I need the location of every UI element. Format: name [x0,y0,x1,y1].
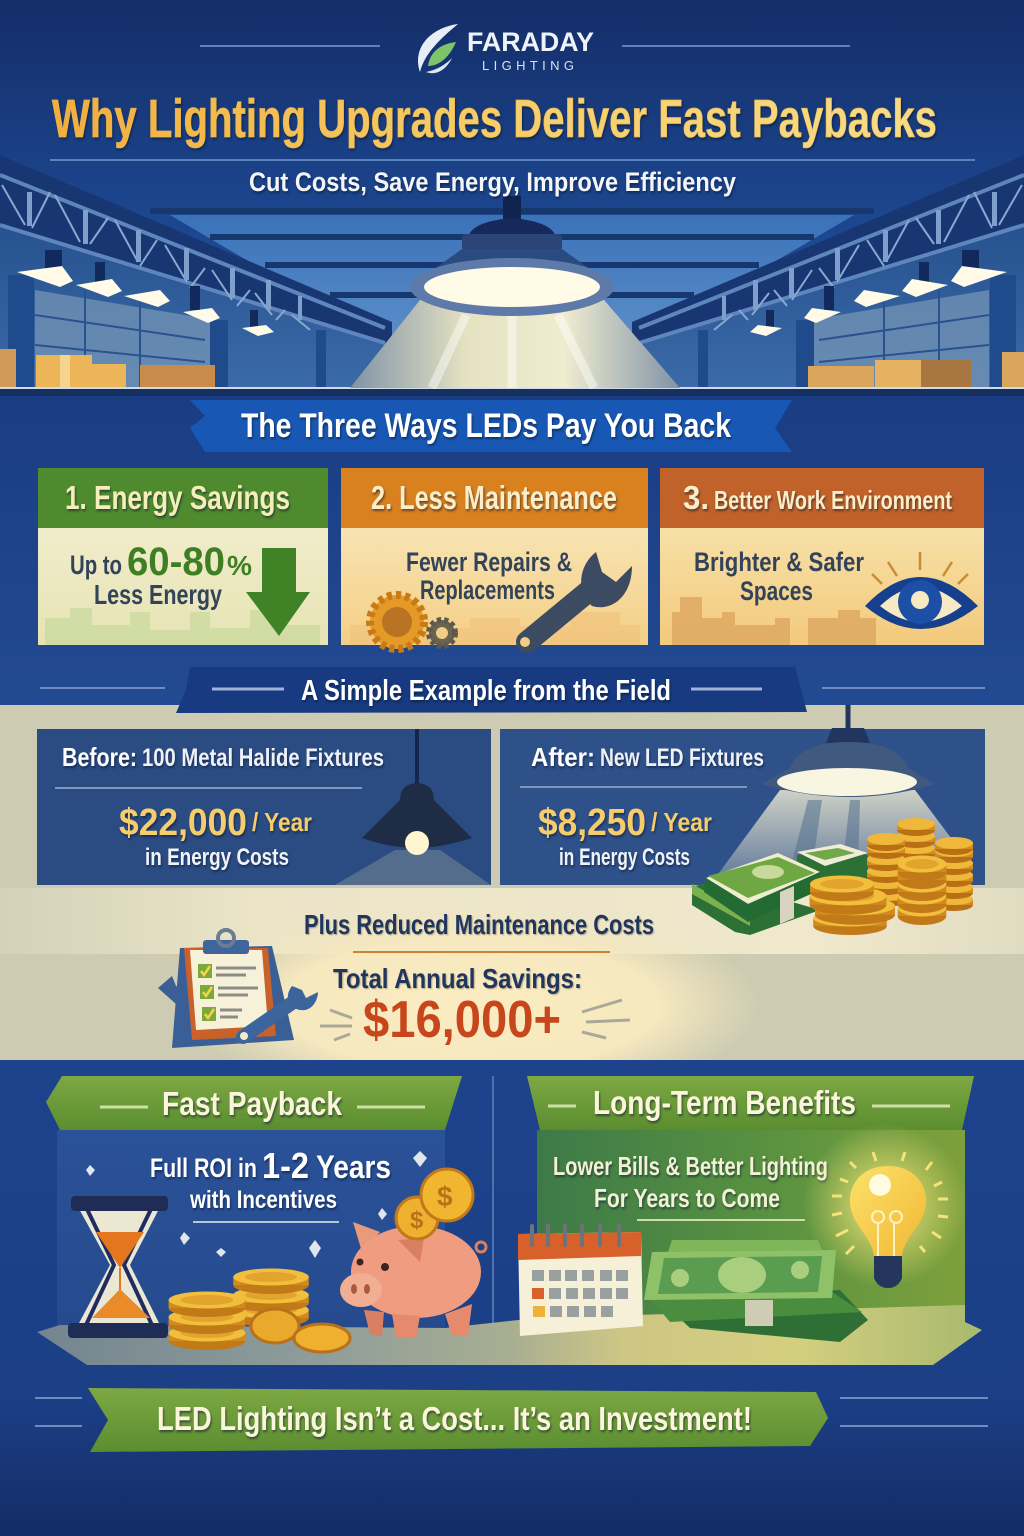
text: plus reduced maintenance costs: Plus Reduced Maintenance Costs [304,909,654,940]
benefits text [553,1151,828,1213]
floor line [0,387,1024,389]
fast payback banner: Fast Payback [162,1085,343,1122]
icon: falling dollar coins [396,1169,473,1239]
panel: better work environment: 3. [683,479,709,516]
icon: piggy bank [340,1222,486,1338]
ROI text: Full ROI in [150,1153,257,1183]
maintenance text: Replacements [420,575,555,605]
before caption: in Energy Costs [145,844,289,871]
icon: gold coin stacks [169,1268,350,1352]
ROI text: with Incentives [189,1186,337,1214]
panel: long-term benefits [527,1076,974,1325]
after caption: in Energy Costs [559,844,690,871]
panel header [38,468,328,528]
benefits text: For Years to Come [594,1183,780,1213]
environment text: Spaces [740,576,813,606]
long-term banner: Long-Term Benefits [593,1084,856,1121]
icon: gears [370,595,455,649]
right row of ceiling lights [750,250,1007,336]
icon: hourglass [68,1196,168,1338]
left wall [0,225,392,388]
icon: light bulb [803,1123,967,1288]
left row of ceiling lights [17,250,274,336]
logo: Faraday Lighting: FARADAY [467,27,594,57]
after amount: $8,250 [538,802,646,844]
energy text: % [227,550,252,581]
before heading: 100 Metal Halide Fixtures [142,744,384,772]
light beam [350,300,680,388]
banner: LED lighting is an investment [35,1388,988,1452]
panel header [341,468,648,528]
icon: banknote stack [644,1240,868,1342]
after heading [531,742,764,772]
text: total annual savings: Total Annual Savings: [333,963,582,994]
panel: energy savings [38,468,328,645]
maintenance text [406,547,572,605]
before heading [62,742,384,772]
subtitle: Cut Costs, Save Energy, Improve Efficiency [249,167,736,197]
panel: fast payback [46,1076,462,1330]
banner: The Three Ways LEDs Pay You Back [190,400,792,452]
skyline decoration [350,612,640,645]
right roof truss [632,155,1024,345]
banner: A Simple Example from the Field [40,667,985,713]
ROI text: Years [316,1149,391,1185]
panel: better work environment: Better Work Environment [714,485,952,515]
divider line [492,1076,494,1330]
after amount [538,802,712,844]
energy text: Less Energy [94,579,222,610]
energy text: 60-80 [127,540,225,584]
after heading: After: [531,742,595,772]
panel: after [500,705,985,885]
energy text [70,540,252,610]
icon: LED lamp [710,705,960,885]
text: savings amount: $16,000+ [363,991,561,1049]
sparkles [86,1151,427,1258]
before amount: $22,000 [119,802,247,844]
left stacked boxes [0,349,215,387]
benefits text: Lower Bills & Better Lighting [553,1151,828,1181]
banner: The Three Ways LEDs Pay You Back: The Three Ways LEDs Pay You Back [241,407,731,445]
icon: falling dollar coins: $ [437,1181,453,1212]
warehouse ceiling [170,215,854,335]
banner: LED lighting is an investment: LED Lighting Isn’t a Cost... It’s an Investment! [157,1400,752,1437]
logo: Faraday Lighting [200,24,850,73]
maintenance text: Fewer Repairs & [406,547,572,577]
after amount: / Year [651,807,712,837]
panel: better work environment [660,468,984,645]
icon: eye [865,552,978,629]
environment text [694,547,864,606]
fast payback banner [46,1076,462,1130]
long-term banner [527,1076,974,1130]
panel: less maintenance [341,468,648,649]
before heading: Before: [62,742,137,772]
icon: clipboard and wrench [158,930,318,1048]
coin stacks [810,818,973,935]
icon: pendant lamp [335,729,491,885]
icon: green down arrow [246,548,310,636]
band divider [0,389,1024,396]
large cash stack [692,853,820,935]
icon: cash stacks and coins [692,818,973,935]
title rule [50,159,975,161]
left roof truss [0,155,392,345]
icon: falling dollar coins: $ [410,1207,424,1234]
environment text: Brighter & Safer [694,547,864,577]
panel header [660,468,984,528]
right wall [632,225,1024,388]
logo: Faraday Lighting: LIGHTING [482,58,574,73]
accent rule [353,951,610,953]
after heading: New LED Fixtures [600,744,764,772]
panel: energy savings: 1. Energy Savings [65,479,290,516]
small cash stack [797,844,868,890]
skyline decoration [672,597,876,645]
energy text: Up to [70,550,122,580]
panel: less maintenance: 2. Less Maintenance [371,479,617,516]
high-bay lamp [410,196,614,316]
before amount: / Year [252,807,312,837]
banner: A Simple Example from the Field: A Simple Example from the Field [301,675,671,707]
icon: wrench [520,552,632,647]
platform [37,1305,982,1365]
ROI text: 1-2 [262,1145,309,1186]
right stacked boxes [808,352,1024,387]
ROI text [150,1145,391,1214]
skyline decoration [45,608,320,645]
icon: calendar [518,1226,643,1336]
panel: before [37,729,491,885]
warehouse illustration [0,155,1024,389]
